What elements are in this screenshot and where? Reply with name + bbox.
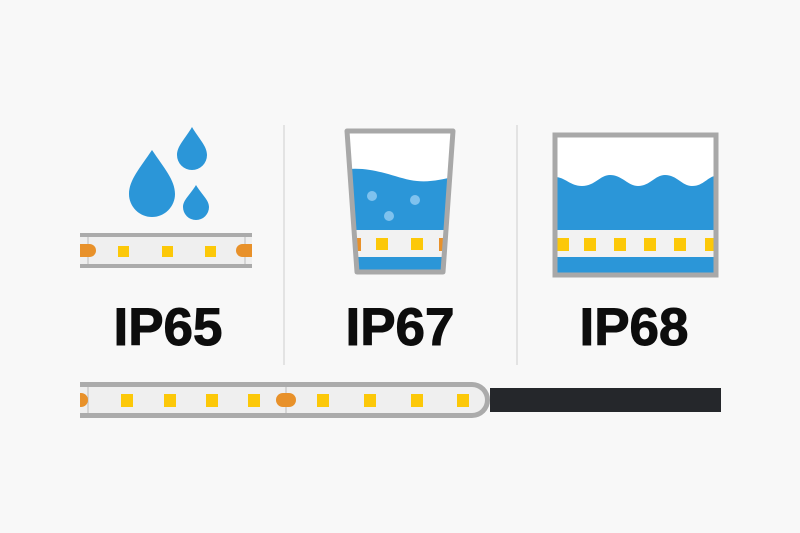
icon: submerged box: [555, 135, 716, 275]
icon: glass of water with strip: [340, 128, 460, 278]
label IP68: IP68: [579, 298, 689, 357]
icon: water drops: [129, 127, 209, 220]
IP65 strip: [70, 230, 262, 270]
label IP65: IP65: [113, 298, 223, 357]
bottom strip with cable: [68, 380, 721, 420]
label IP67: IP67: [345, 298, 455, 357]
